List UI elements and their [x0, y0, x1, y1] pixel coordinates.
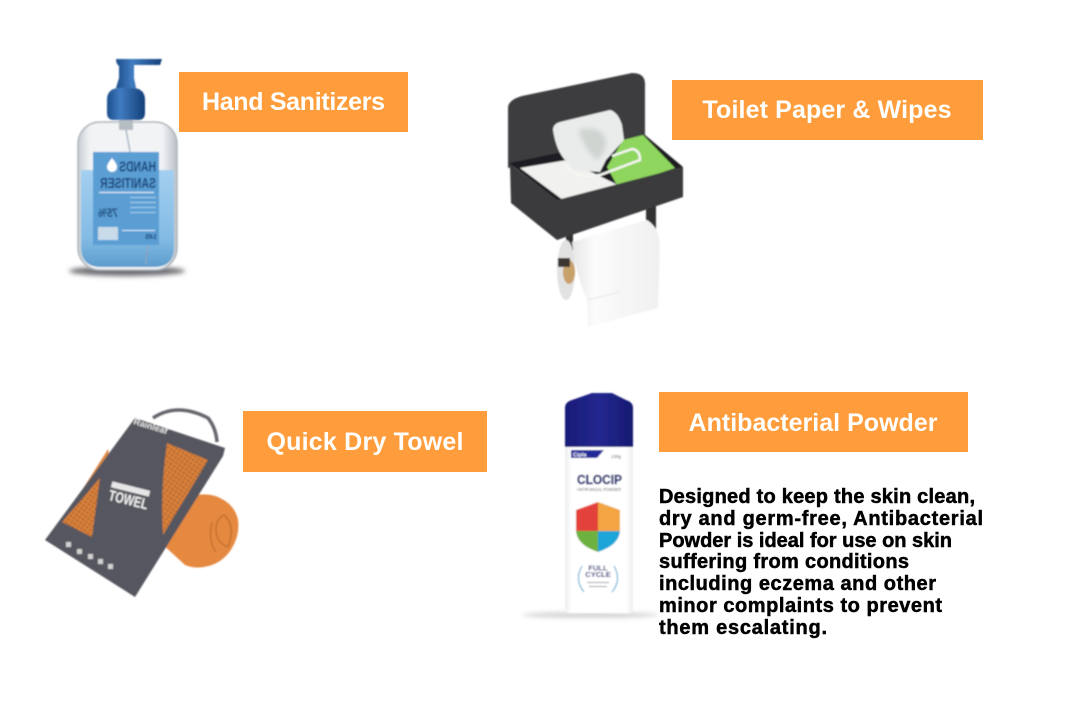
product name: ANTIFUNGAL POWDER [577, 487, 622, 492]
text block: antibacterial powder description: including eczema and other [659, 573, 936, 595]
brand tag: Cipla [573, 452, 587, 458]
label: Hand Sanitizers: Hand Sanitizers [202, 88, 385, 116]
back plate [508, 73, 645, 168]
towel bag [45, 418, 225, 597]
label: Toilet Paper & Wipes [672, 80, 983, 140]
label: Quick Dry Towel: Quick Dry Towel [266, 428, 464, 456]
icon: toilet paper holder with wipes [508, 73, 683, 327]
label: Quick Dry Towel [243, 411, 487, 472]
icon: quick dry towel with bag [45, 410, 238, 597]
mesh left [62, 478, 100, 537]
label: Hand Sanitizers [179, 72, 408, 132]
paper roll [557, 220, 660, 327]
text block: antibacterial powder description [659, 486, 983, 639]
text block: antibacterial powder description: suffering from conditions [659, 551, 909, 573]
pump head [116, 59, 162, 88]
bag icons [66, 542, 113, 569]
wipes lid [553, 110, 640, 176]
bottle label [93, 152, 159, 245]
text block: antibacterial powder description: dry and germ-free, Antibacterial [659, 508, 983, 530]
tube [125, 125, 155, 265]
shield [576, 502, 620, 552]
wipes pack green [607, 135, 675, 187]
bottle cap [565, 393, 633, 447]
bottle body [565, 445, 633, 613]
icon: hand sanitizer bottle [69, 59, 185, 276]
product name: CLOCIP [577, 473, 622, 487]
bottle shadow [69, 266, 185, 276]
bag brand: Rainleaf [132, 416, 170, 436]
text block: antibacterial powder description: Designed to keep the skin clean, [659, 486, 975, 508]
full cycle badge: CYCLE [585, 570, 611, 579]
pump neck [119, 120, 133, 130]
tray front [510, 164, 683, 240]
bag text: TOWEL [107, 487, 150, 513]
bag text [107, 481, 151, 513]
label: Antibacterial Powder: Antibacterial Powder [688, 409, 938, 437]
towel behind bag [62, 449, 112, 537]
mesh right [162, 443, 208, 535]
full cycle badge: FULL [588, 564, 608, 572]
bracket [566, 205, 656, 262]
text block: antibacterial powder description: Powder is ideal for use on skin [659, 530, 952, 552]
bottle shadow [522, 612, 658, 618]
bottle label: 145 [145, 234, 157, 241]
text block: antibacterial powder description: minor complaints to prevent [659, 595, 942, 617]
brand tag: 100g [611, 454, 622, 459]
pump collar [107, 88, 145, 120]
bottle label: HANDS [119, 158, 156, 176]
icon: antibacterial powder bottle [522, 393, 658, 618]
bottle label: 75% [98, 206, 118, 220]
bottle body [78, 122, 177, 270]
wipes pack white [520, 160, 622, 200]
brand tag [571, 450, 622, 459]
tray interior [509, 135, 683, 201]
bag handle [153, 410, 217, 442]
label: Toilet Paper & Wipes: Toilet Paper & Wipes [702, 96, 952, 124]
liquid [81, 170, 174, 267]
text block: antibacterial powder description: them escalating. [659, 617, 827, 639]
label: Antibacterial Powder [659, 392, 968, 452]
rolled towel [160, 494, 238, 568]
bottle label: SANITISER [100, 175, 156, 192]
full cycle badge [578, 564, 618, 592]
